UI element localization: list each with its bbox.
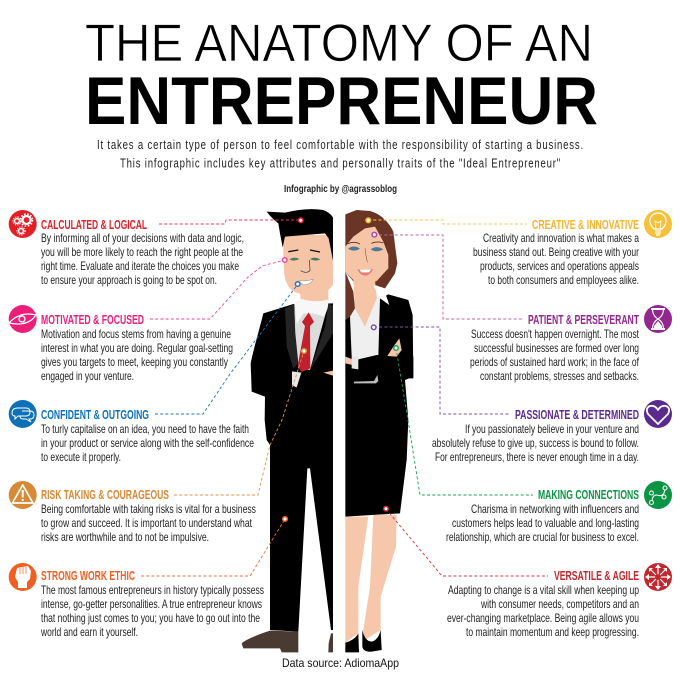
woman folded arm bbox=[358, 355, 413, 378]
data source: Data source: AdiomaApp bbox=[282, 656, 399, 670]
panel: creative and innovative bbox=[473, 210, 672, 287]
connector: calculated and logical bbox=[159, 220, 300, 224]
man brows bbox=[288, 250, 320, 252]
panel: motivated and focused bbox=[9, 305, 233, 383]
heading: CONFIDENT & OUTGOING bbox=[41, 407, 149, 422]
body text bbox=[41, 502, 256, 544]
body text: world and earn it yourself. bbox=[40, 625, 138, 639]
connector: strong work ethic bbox=[141, 519, 285, 576]
panel: passionate and determined bbox=[432, 400, 672, 464]
body text: you will be more likely to reach the right people at the bbox=[41, 245, 243, 259]
man hair bbox=[267, 209, 333, 261]
man face bbox=[283, 235, 333, 295]
man eyes bbox=[290, 258, 320, 261]
body text bbox=[41, 327, 233, 383]
woman brows bbox=[347, 242, 383, 244]
body text bbox=[473, 231, 639, 287]
body text: right time. Evaluate and iterate the choices you make bbox=[41, 259, 239, 273]
connector: passionate and determined bbox=[374, 327, 510, 414]
connector: risk taking bbox=[174, 351, 304, 495]
woman shirt bbox=[350, 290, 380, 360]
connector: motivated and focused bbox=[150, 260, 285, 319]
heading: MOTIVATED & FOCUSED bbox=[41, 312, 144, 327]
icon: warning triangle bbox=[9, 481, 37, 509]
panel: patient and perseverant bbox=[470, 305, 672, 383]
woman neck and chest bbox=[353, 280, 377, 327]
connector: versatile and agile bbox=[386, 509, 548, 576]
connector: patient and perseverant bbox=[374, 235, 522, 319]
subtitle bbox=[97, 137, 584, 170]
icon: heart bbox=[644, 400, 672, 428]
connector: creative and innovative bbox=[368, 220, 527, 224]
body text: interest in what you are doing. Regular goal-setting bbox=[41, 341, 233, 355]
body text: By informing all of your decisions with data and logic, bbox=[41, 231, 244, 245]
woman nose bbox=[365, 248, 367, 262]
panel: calculated and logical bbox=[9, 210, 244, 287]
title: THE ANATOMY OF AN bbox=[85, 14, 593, 73]
panel: strong work ethic bbox=[9, 563, 264, 639]
man neck bbox=[299, 287, 328, 301]
heading: STRONG WORK ETHIC bbox=[41, 568, 135, 583]
icon: outward arrows bbox=[644, 563, 672, 591]
body text: engaged in your venture. bbox=[41, 369, 134, 383]
icon: eye bbox=[9, 305, 37, 333]
title bbox=[85, 14, 598, 139]
figure: businesswoman bbox=[345, 210, 413, 652]
panel: making connections bbox=[446, 481, 672, 544]
woman jacket and skirt bbox=[345, 294, 413, 517]
man lapels bbox=[285, 304, 298, 368]
body text: risks are worthwhile and to not be impulsive. bbox=[41, 530, 209, 544]
body text: To turly capitalise on an idea, you need to have the faith bbox=[41, 422, 249, 436]
connector: confident and outgoing bbox=[155, 284, 298, 414]
body text: in your product or service along with the self-confidence bbox=[41, 436, 254, 450]
body text bbox=[40, 583, 264, 639]
panel: versatile and agile bbox=[447, 563, 672, 639]
body text bbox=[41, 422, 254, 464]
woman lips bbox=[357, 269, 373, 276]
icon: hourglass bbox=[644, 305, 672, 333]
woman shoes bbox=[345, 630, 382, 652]
body text: intense, go-getter personalities. A true entrepreneur knows bbox=[41, 597, 262, 611]
heading: VERSATILE & AGILE bbox=[554, 568, 639, 583]
woman hair bbox=[345, 210, 397, 288]
icon: raised fist bbox=[9, 563, 37, 591]
connector: making connections bbox=[396, 348, 533, 495]
connector dots bbox=[282, 218, 398, 521]
body text: Motivation and focus stems from having a genuine bbox=[41, 327, 231, 341]
man tie bbox=[298, 312, 314, 372]
body text bbox=[41, 231, 244, 287]
woman eyes bbox=[348, 246, 383, 251]
body text: to grow and succeed. It is important to understand what bbox=[41, 516, 252, 530]
body text: gives you targets to meet, keeping you constantly bbox=[41, 355, 228, 369]
woman collar bbox=[373, 285, 389, 305]
body text bbox=[470, 327, 639, 383]
man suit and trousers bbox=[251, 303, 333, 632]
icon: network nodes bbox=[644, 481, 672, 509]
title: ENTREPRENEUR bbox=[85, 63, 598, 139]
woman hand bbox=[387, 338, 402, 357]
panel: confident and outgoing bbox=[9, 400, 254, 464]
man crossed arm bbox=[275, 367, 333, 400]
body text bbox=[446, 502, 639, 544]
heading: RISK TAKING & COURAGEOUS bbox=[41, 487, 169, 502]
body text bbox=[432, 422, 639, 464]
icon: gears bbox=[9, 210, 37, 238]
woman pocket bbox=[354, 375, 378, 383]
woman face bbox=[345, 227, 388, 285]
body text: The most famous entrepreneurs in history typically possess bbox=[41, 583, 264, 597]
body text: that nothing just comes to you; you have to go out into the bbox=[41, 611, 260, 625]
man smile bbox=[298, 279, 313, 285]
credit line: Infographic by @agrassoblog bbox=[284, 183, 397, 195]
body text: Being comfortable with taking risks is vital for a business bbox=[41, 502, 256, 516]
body text bbox=[447, 583, 639, 639]
man shoes bbox=[242, 631, 298, 652]
icon: light bulb bbox=[644, 210, 672, 238]
body text: to execute it properly. bbox=[41, 450, 121, 464]
icon: speech bubbles bbox=[9, 400, 37, 428]
man nose bbox=[301, 260, 310, 272]
woman legs bbox=[345, 515, 397, 643]
panel: risk taking and courageous bbox=[9, 481, 256, 544]
figure: businessman bbox=[242, 209, 333, 652]
man shirt bbox=[294, 304, 328, 370]
heading: CALCULATED & LOGICAL bbox=[41, 217, 147, 232]
body text: to ensure your approach is going to be spot on. bbox=[41, 273, 217, 287]
